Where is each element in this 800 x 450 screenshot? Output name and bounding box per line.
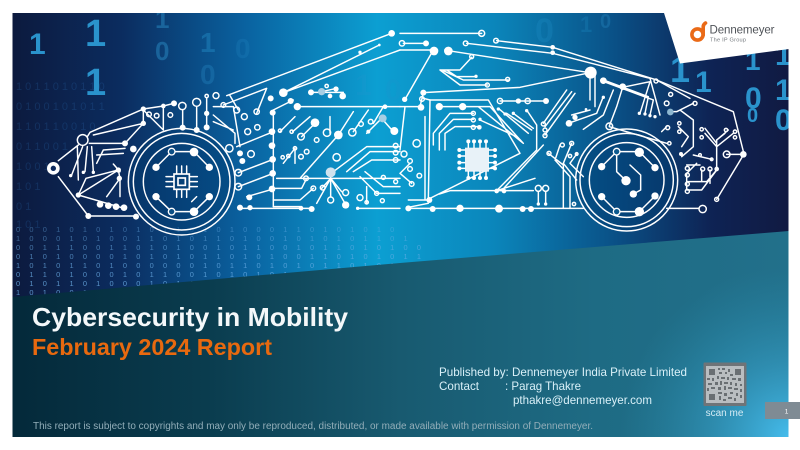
rear wheel xyxy=(576,129,678,231)
publisher line: Published by: Dennemeyer India Private Limited xyxy=(439,365,687,379)
large binary digits: 0 xyxy=(775,104,792,137)
large binary digits: 1 xyxy=(580,12,592,37)
circuit car illustration xyxy=(47,30,747,235)
small binary digits top left: 0 1 xyxy=(16,201,31,213)
small binary digits top left: 1 0 0 1 0 xyxy=(16,161,59,173)
scan me label: scan me xyxy=(706,408,744,419)
large binary digits: 0 xyxy=(155,36,169,66)
large binary digits: 0 xyxy=(535,12,554,50)
small binary digits bottom band: 0 0 0 1 0 1 0 1 0 1 0 1 1 0 1 0 1 0 0 0 1 1 0 1 0 1 0 1 0 xyxy=(16,225,398,234)
large binary digits: 0 xyxy=(235,33,251,64)
large binary digits xyxy=(30,13,788,130)
small binary digits bottom band: 0 1 0 1 0 0 0 0 1 0 1 0 1 0 1 1 0 1 0 1 0 0 1 1 0 1 0 1 0 1 1 xyxy=(16,252,425,261)
cabin chip circuits xyxy=(401,90,583,213)
front wheel chip xyxy=(166,166,197,197)
publisher details xyxy=(439,365,687,407)
copyright notice: This report is subject to copyrights and may only be reproduced, distributed, or made available with permission of Dennemeyer. xyxy=(33,421,593,432)
large binary digits: 1 xyxy=(745,45,761,76)
binary digit background xyxy=(16,4,792,297)
contact name: : Parag Thakre xyxy=(505,379,581,393)
circuit car: front half xyxy=(47,30,400,235)
contact email: pthakre@dennemeyer.com xyxy=(513,393,652,407)
small binary digits top left: 0 1 0 0 1 0 1 0 1 1 xyxy=(16,101,105,113)
small binary digits bottom band: 1 0 1 0 0 1 0 1 1 0 1 1 0 1 0 1 0 0 1 0 1 1 0 1 0 1 0 1 1 0 1 0 xyxy=(16,288,438,297)
small binary digits top left xyxy=(16,81,105,231)
small binary digits bottom band: 0 0 1 1 1 0 0 1 1 0 1 0 1 0 0 1 0 1 1 0 0 1 0 1 1 0 1 0 1 0 0 xyxy=(16,243,425,252)
large binary digits: 0 xyxy=(200,59,216,90)
large binary digits: 0 xyxy=(747,105,758,127)
subtitle: February 2024 Report xyxy=(32,334,272,360)
logo wordmark: Dennemeyer xyxy=(710,24,775,36)
front wheel xyxy=(128,128,235,235)
large binary digits: 1 xyxy=(775,74,792,107)
logo mark xyxy=(692,23,706,40)
large binary digits: 1 xyxy=(155,4,169,34)
large binary digits: 1 xyxy=(85,62,106,104)
small binary digits bottom band: 1 0 1 0 1 1 0 1 0 0 0 0 0 0 1 0 1 1 0 1 0 1 0 1 1 0 1 0 1 1 0 1 xyxy=(16,261,438,270)
door and rear circuits xyxy=(400,80,747,213)
contact label: Contact xyxy=(439,379,480,393)
roof circuits xyxy=(399,30,744,200)
small binary digits top left: 1 0 1 xyxy=(16,181,40,193)
large binary digits: 1 xyxy=(695,66,712,99)
large binary digits: 1 xyxy=(670,49,690,90)
hood circuits xyxy=(179,33,400,212)
large binary digits: 0 xyxy=(600,11,611,33)
logo xyxy=(692,23,775,44)
small binary digits bottom band: 0 1 1 0 1 0 0 0 1 0 1 1 0 0 1 0 1 0 1 0 1 1 0 1 0 1 1 0 1 0 1 0 xyxy=(16,270,438,279)
teal title band xyxy=(12,231,789,437)
large binary digits: 0 xyxy=(385,74,402,107)
small binary digits top left: 1 0 1 1 0 1 0 1 1 0 xyxy=(16,81,105,93)
large binary digits: 1 xyxy=(85,13,106,55)
title: Cybersecurity in Mobility xyxy=(32,302,349,332)
small binary digits top left: 0 1 1 0 0 1 xyxy=(16,141,68,153)
small binary digits bottom band: 0 1 0 1 1 0 1 0 0 0 1 0 1 1 0 1 0 1 1 0 1 0 1 0 1 1 0 1 0 0 1 1 xyxy=(16,279,438,288)
logo tagline: The IP Group xyxy=(710,38,746,44)
QR code xyxy=(704,362,746,406)
large binary digits: 1 xyxy=(775,39,792,72)
cabin front circuits xyxy=(273,30,400,210)
large binary digits: 1 xyxy=(29,28,46,61)
small binary digits bottom band xyxy=(16,225,438,297)
small binary digits top left: 1 1 0 1 1 0 0 1 0 xyxy=(16,121,96,133)
small binary digits bottom band: 1 0 0 0 1 0 1 0 0 1 1 0 1 0 1 1 0 1 0 0 1 0 1 0 1 0 1 1 0 1 xyxy=(16,234,411,243)
large binary digits: 0 xyxy=(745,82,762,115)
logo corner panel xyxy=(664,0,800,64)
page number tab xyxy=(765,402,800,419)
large binary digits: 1 xyxy=(200,27,216,58)
large binary digits: 1 xyxy=(355,69,372,102)
page number tab: 1 xyxy=(785,408,789,416)
small binary digits top left: 1 0 1 xyxy=(16,219,40,231)
nose circuits xyxy=(47,100,177,220)
circuit car: rear half xyxy=(399,30,747,231)
